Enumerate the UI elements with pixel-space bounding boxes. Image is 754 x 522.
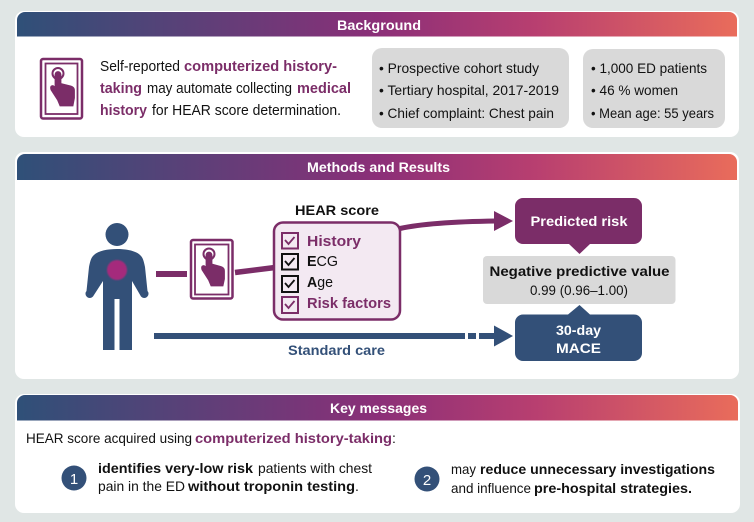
message 2	[414, 461, 715, 496]
patients box: • 1,000 ED patients	[591, 60, 707, 76]
number badge 2	[414, 466, 440, 492]
HEAR score checklist: Risk factors	[307, 296, 391, 312]
background text: history	[100, 103, 147, 119]
HEAR score title: HEAR score	[295, 202, 379, 218]
patients box: • 46 % women	[591, 82, 678, 98]
message 2: and influence	[451, 480, 531, 496]
patients box	[583, 49, 725, 128]
panel: key messages	[15, 394, 740, 513]
key messages intro: computerized history-taking	[195, 430, 392, 446]
message 1: patients with chest	[258, 460, 372, 476]
HEAR score checklist: History	[307, 234, 361, 250]
study design box: • Prospective cohort study	[379, 60, 539, 76]
negative predictive value box: 0.99 (0.96–1.00)	[530, 282, 628, 298]
study design box	[372, 48, 569, 128]
arrow: tablet to HEAR score	[235, 268, 275, 272]
message 2: reduce unnecessary investigations	[480, 461, 715, 477]
methods header	[17, 154, 737, 180]
message 1: identifies very-low risk	[98, 460, 253, 476]
background header: Background	[337, 18, 421, 33]
predicted risk box	[515, 198, 642, 254]
key messages intro: :	[392, 430, 396, 446]
background text: taking	[100, 81, 142, 97]
background text: may automate collecting	[147, 81, 292, 97]
check: risk factors	[282, 297, 298, 313]
arrow: standard care	[154, 326, 513, 346]
icon: patient figure	[85, 223, 149, 350]
30-day MACE box	[515, 305, 642, 361]
HEAR score checklist: ECG	[307, 254, 338, 270]
study design box: • Tertiary hospital, 2017-2019	[379, 82, 559, 98]
message 2: pre-hospital strategies.	[534, 480, 692, 496]
message 1: .	[355, 478, 359, 494]
methods header: Methods and Results	[307, 160, 450, 175]
message 1	[62, 460, 372, 494]
background text: for HEAR score determination.	[152, 103, 341, 119]
number badge 2: 2	[423, 472, 431, 489]
check: age	[282, 276, 298, 292]
background text: medical	[297, 81, 351, 97]
number badge 1	[62, 466, 86, 490]
arrow: HEAR score to predicted risk	[400, 211, 513, 231]
message 1: without troponin testing	[187, 478, 355, 494]
background header	[17, 12, 737, 36]
icon: tablet	[191, 240, 232, 298]
study design box: • Chief complaint: Chest pain	[379, 105, 554, 121]
panel: background	[15, 11, 739, 137]
number badge 1: 1	[70, 471, 78, 488]
30-day MACE box: MACE	[556, 341, 601, 356]
arrow: patient to tablet	[156, 271, 187, 277]
key messages header: Key messages	[330, 401, 427, 416]
patients box: • Mean age: 55 years	[591, 105, 714, 121]
background text	[100, 59, 351, 119]
message 2: may	[451, 461, 476, 477]
message 1: pain in the ED	[98, 478, 185, 494]
check: history	[282, 233, 298, 248]
background text: Self-reported	[100, 59, 180, 75]
key messages intro: HEAR score acquired using	[26, 430, 192, 446]
negative predictive value box	[483, 256, 676, 304]
HEAR score checklist: Age	[307, 275, 333, 291]
check: ECG	[282, 254, 298, 270]
predicted risk box: Predicted risk	[530, 214, 628, 229]
background text: computerized history-	[184, 59, 337, 75]
negative predictive value box: Negative predictive value	[490, 263, 670, 279]
key messages intro	[26, 430, 396, 446]
standard care label: Standard care	[288, 343, 386, 358]
icon: tablet with pointing hand	[41, 59, 82, 118]
HEAR score checklist	[274, 222, 400, 320]
30-day MACE box: 30-day	[556, 323, 602, 338]
panel: methods and results	[15, 152, 739, 379]
key messages header	[17, 395, 738, 420]
